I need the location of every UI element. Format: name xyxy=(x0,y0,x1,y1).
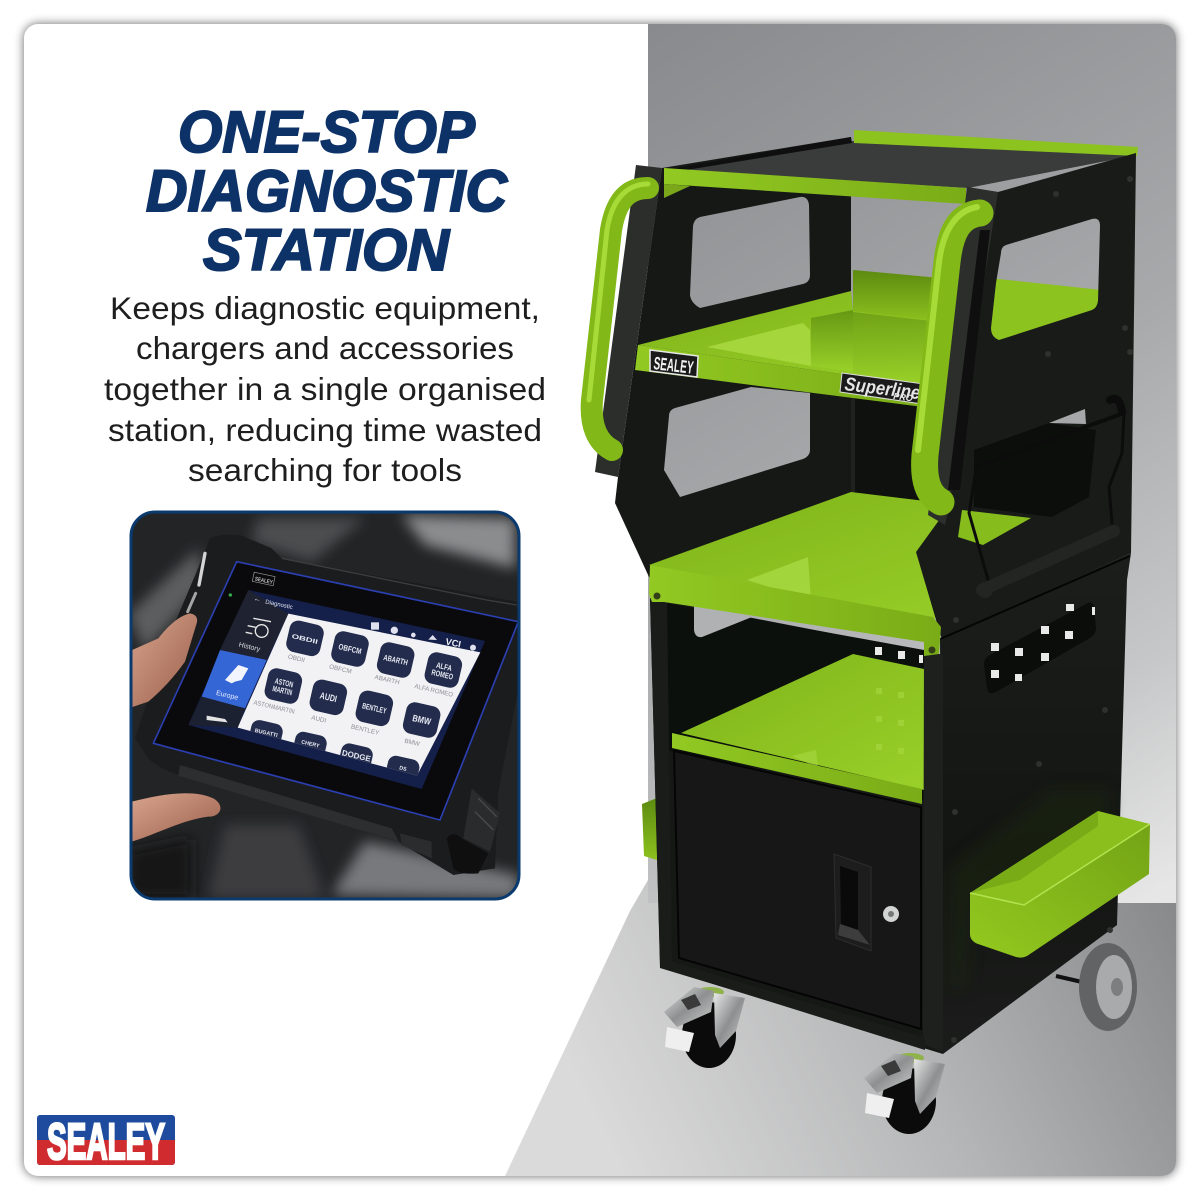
toolbar icons xyxy=(371,622,476,651)
wire basket handle xyxy=(969,399,1124,590)
tablet bezel xyxy=(153,562,518,820)
app labels: ABARTH xyxy=(374,674,401,687)
cabinet shelf reflections xyxy=(792,688,904,768)
back wall edge xyxy=(851,392,855,500)
VCI status: VCI xyxy=(445,637,462,650)
corner tab left xyxy=(654,592,660,600)
title xyxy=(146,100,508,283)
app icons xyxy=(246,619,464,794)
left grab handle xyxy=(589,184,648,450)
app labels xyxy=(253,654,454,748)
app icons: CHERY xyxy=(301,739,320,750)
bezel SEALEY mark xyxy=(252,572,275,586)
front left post xyxy=(650,598,672,968)
panel joint xyxy=(938,556,1130,640)
app icons: ALFA xyxy=(435,661,453,673)
Superline Pro badge: PRO xyxy=(893,391,913,403)
gap behind pouch xyxy=(1049,409,1086,424)
left flange xyxy=(595,165,662,477)
door lock xyxy=(883,906,899,922)
bin shadow xyxy=(950,790,1110,990)
front right post xyxy=(923,650,943,1052)
app icons: BMW xyxy=(411,713,432,727)
door handle xyxy=(834,854,871,951)
mid shelf dark reflection xyxy=(811,310,853,372)
app icons: AUDI xyxy=(319,691,338,704)
lower frame interior xyxy=(666,603,924,800)
car glyph xyxy=(207,716,228,722)
right upper panel xyxy=(916,153,1136,640)
side column xyxy=(220,590,288,660)
tablet body xyxy=(135,535,522,875)
right grab handle xyxy=(918,207,980,502)
cabinet shelf lip xyxy=(672,733,922,804)
panel fasteners xyxy=(951,176,1133,1043)
app icons: DODGE xyxy=(341,748,372,764)
description text: station, reducing time wasted xyxy=(108,412,542,448)
upper back wall below shelf xyxy=(851,395,930,510)
app labels: BENTLEY xyxy=(350,724,381,737)
app icons: MARTIN xyxy=(271,684,293,697)
hand fingers xyxy=(128,613,197,708)
app labels: OBFCM xyxy=(328,664,352,676)
description text: together in a single organised xyxy=(104,371,546,407)
cabinet side xyxy=(940,553,1131,1054)
title: ONE-STOP xyxy=(178,100,475,165)
side pouch opening xyxy=(958,423,1096,545)
corner tab right xyxy=(928,646,936,654)
rear wheel xyxy=(1056,943,1137,1031)
Europe tile xyxy=(202,650,267,708)
SEALEY badge xyxy=(650,350,698,378)
SEALEY logo: SEALEY xyxy=(47,1113,165,1170)
vehicle tile xyxy=(188,697,245,728)
bezel SEALEY mark: SEALEY xyxy=(254,576,273,586)
top front lip xyxy=(664,168,966,204)
lower finger xyxy=(132,793,220,842)
diagnostic header: ← xyxy=(253,593,262,604)
large shelf surface xyxy=(649,492,1040,620)
lower frame backing xyxy=(650,598,943,1054)
history icon xyxy=(246,618,271,637)
left far panel xyxy=(615,137,851,577)
back black lip xyxy=(665,137,852,173)
shelf seen through right window xyxy=(960,275,1102,348)
app grid area xyxy=(238,614,480,776)
pouch xyxy=(974,423,1096,517)
front right caster xyxy=(864,1053,945,1134)
front left caster xyxy=(664,987,745,1068)
mid shelf reflection xyxy=(707,323,811,366)
back wall holes xyxy=(875,647,923,663)
app icons: BUGATTI xyxy=(254,728,279,739)
tablet left highlights xyxy=(188,553,205,612)
tablet top edge line xyxy=(282,558,517,605)
app labels: ALFA ROMEO xyxy=(414,683,454,699)
large shelf front lip xyxy=(649,565,941,656)
description text: chargers and accessories xyxy=(136,330,514,366)
cabinet shelf surface xyxy=(681,654,924,790)
SEALEY badge: SEALEY xyxy=(653,353,695,378)
description text xyxy=(104,290,546,488)
handle shadow on panel xyxy=(948,230,990,490)
description text: searching for tools xyxy=(188,452,462,488)
right flange xyxy=(928,187,998,525)
mid shelf surface xyxy=(638,291,945,386)
status led xyxy=(229,593,232,597)
app labels: ASTONMARTIN xyxy=(253,699,296,716)
history label: History xyxy=(238,642,261,654)
app icons: ROMEO xyxy=(431,668,454,682)
title: STATION xyxy=(203,218,450,283)
diagnostic trolley xyxy=(589,130,1150,1134)
tablet lower edge band xyxy=(178,765,399,842)
tablet screen xyxy=(188,590,485,789)
SEALEY logo xyxy=(37,1113,175,1170)
top plate xyxy=(665,141,1137,188)
Superline Pro badge: Superline xyxy=(843,374,922,404)
app labels: OBDII xyxy=(287,654,306,664)
app icons: OBFCM xyxy=(338,642,363,656)
app labels: BMW xyxy=(404,738,420,748)
description text: Keeps diagnostic equipment, xyxy=(110,290,540,326)
left side bin xyxy=(642,798,657,860)
back green lip xyxy=(854,130,1138,156)
mid shelf centre sheen xyxy=(853,312,940,385)
large shelf reflection xyxy=(747,557,811,600)
app icons: DS xyxy=(399,765,408,773)
right tool bin xyxy=(970,811,1150,958)
app labels: AUDI xyxy=(311,714,327,725)
side perforated slot xyxy=(984,603,1096,693)
app icons: BENTLEY xyxy=(361,701,388,716)
rear window xyxy=(694,600,762,637)
app icons: OBDII xyxy=(291,633,319,646)
mid shelf front lip xyxy=(635,345,925,407)
cabinet door xyxy=(674,751,921,1029)
tablet photo inset xyxy=(128,512,522,899)
Europe tile: Europe xyxy=(215,690,239,702)
app icons: ABARTH xyxy=(383,653,409,667)
diagnostic header: Diagnostic xyxy=(265,599,293,611)
bottom rail xyxy=(660,958,925,1050)
bottom clip bumper xyxy=(400,833,432,858)
mid shelf back wall xyxy=(853,270,940,322)
basket hinge xyxy=(977,582,993,598)
diagnostic header xyxy=(255,598,293,609)
title: DIAGNOSTIC xyxy=(146,159,508,224)
app icons: ASTON xyxy=(274,676,294,689)
grip corner xyxy=(463,788,500,852)
blurred workshop background xyxy=(128,515,518,898)
grip ridges xyxy=(475,798,497,830)
lower corner bumper xyxy=(447,834,488,874)
